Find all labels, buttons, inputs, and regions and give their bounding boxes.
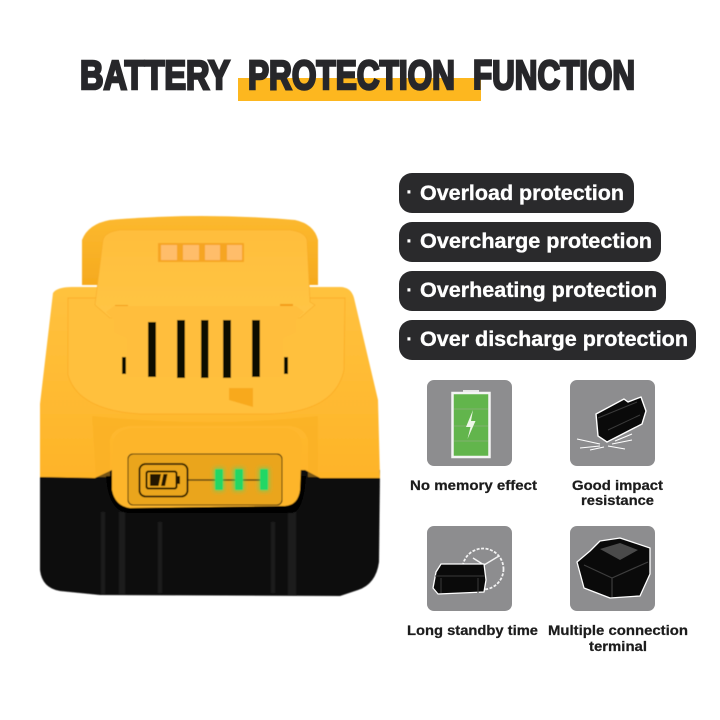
pill: over discharge: Over discharge protection xyxy=(420,327,688,351)
label: Good impact xyxy=(572,477,663,493)
pill: overload xyxy=(399,173,634,213)
pill: over discharge xyxy=(399,320,696,360)
pill: over discharge: · xyxy=(406,328,413,351)
vent skirt xyxy=(106,306,304,377)
label: No memory effect xyxy=(410,477,537,493)
label: terminal xyxy=(589,638,647,654)
title text: FUNCTION xyxy=(473,52,635,98)
label: resistance xyxy=(581,492,654,508)
front yellow tab xyxy=(112,428,302,508)
LED glow xyxy=(214,468,269,491)
protection pills xyxy=(399,173,696,360)
icon: battery impact xyxy=(577,397,646,450)
battery black base xyxy=(40,470,380,596)
vent slots xyxy=(122,320,288,378)
title text: BATTERY xyxy=(80,52,230,98)
top grill xyxy=(158,243,244,262)
indicator line xyxy=(188,479,262,481)
icon: battery with terminals xyxy=(577,538,650,598)
battery gauge icon xyxy=(140,464,188,496)
icon tile xyxy=(570,526,655,611)
front black shoulder xyxy=(106,476,306,513)
icon: clock and battery xyxy=(433,548,504,594)
pill: overcharge: · xyxy=(406,230,413,253)
pill: overheating: Overheating protection xyxy=(420,278,657,302)
lid front plate xyxy=(95,230,315,318)
feature: good impact resistance xyxy=(570,380,663,508)
pill: overload: · xyxy=(406,181,413,204)
icon tile xyxy=(570,380,655,466)
green LEDs xyxy=(215,469,268,490)
title highlight bar xyxy=(238,78,481,101)
label: Multiple connection xyxy=(548,622,688,638)
feature: long standby time xyxy=(407,526,538,638)
feature: multiple connection terminal xyxy=(548,526,688,654)
base ribs xyxy=(101,512,296,595)
lid back plate xyxy=(82,216,318,285)
icon tile xyxy=(427,526,512,611)
pill: overheating xyxy=(399,271,666,311)
title text: PROTECTION xyxy=(248,52,455,98)
label xyxy=(548,622,688,654)
label: Long standby time xyxy=(407,622,538,638)
icon tile xyxy=(427,380,512,466)
latch tab xyxy=(229,388,253,407)
body shoulder shading xyxy=(92,416,318,477)
icon: green battery xyxy=(452,390,490,457)
pill: overload: Overload protection xyxy=(420,181,624,205)
label xyxy=(572,477,663,508)
raised top platform xyxy=(68,298,345,414)
display panel xyxy=(128,454,282,505)
battery photo xyxy=(40,216,380,596)
pill: overcharge: Overcharge protection xyxy=(420,229,652,253)
title text xyxy=(80,52,635,98)
feature: no memory effect xyxy=(410,380,537,493)
pill: overcharge xyxy=(399,222,661,262)
battery yellow body xyxy=(40,287,380,478)
side clips xyxy=(114,304,294,319)
title xyxy=(80,52,635,101)
pill: overheating: · xyxy=(406,279,413,302)
